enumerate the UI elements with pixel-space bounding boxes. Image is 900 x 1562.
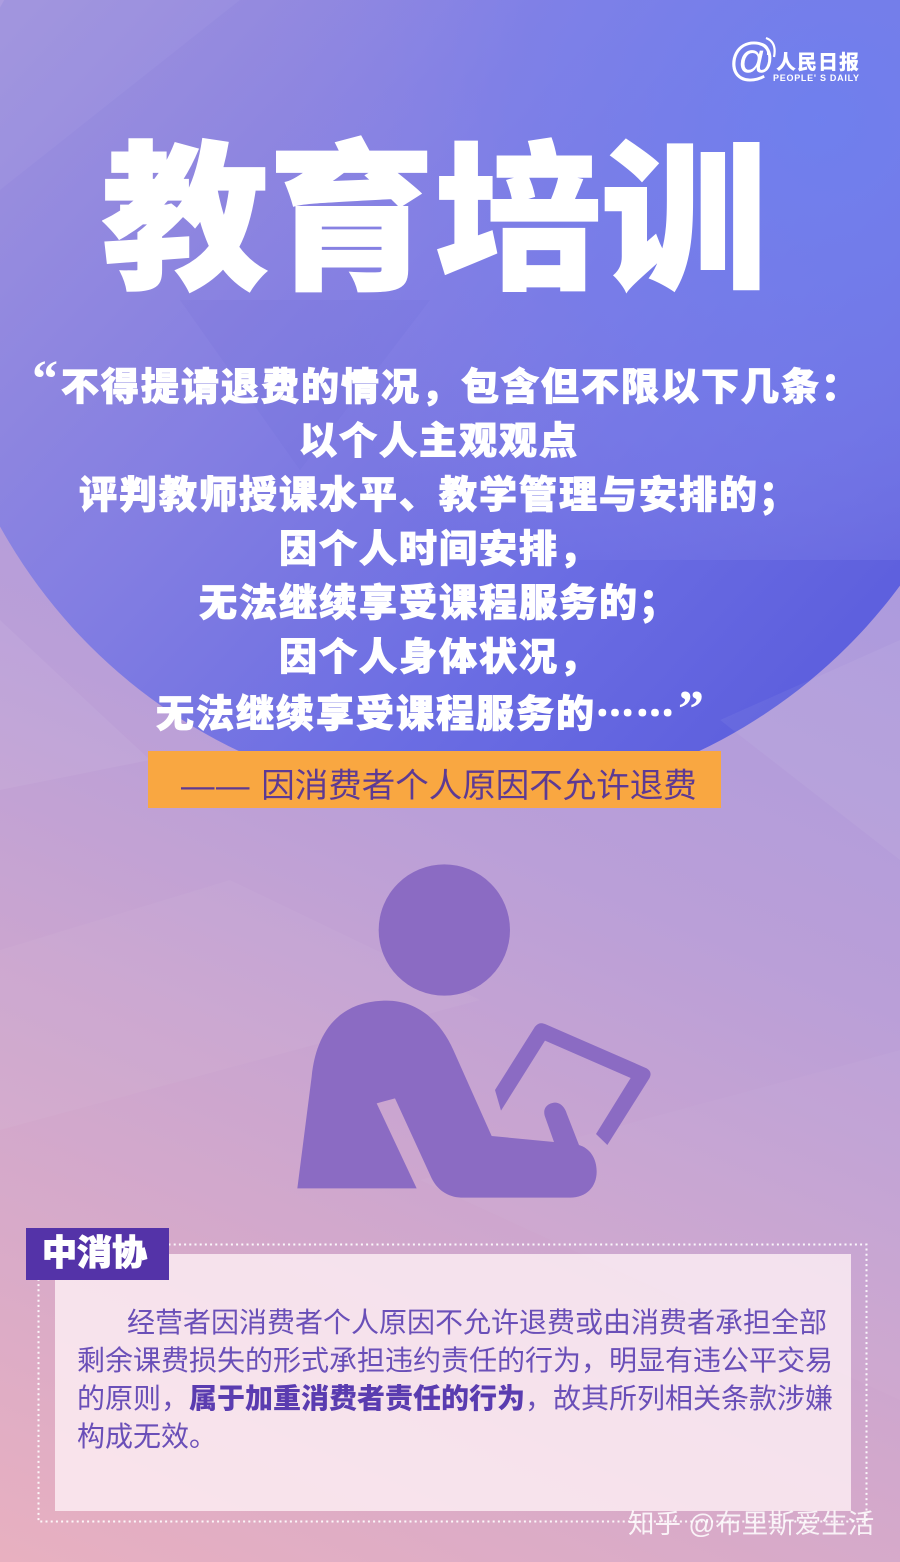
quote line 3: 评判教师授课水平、教学管理与安排的；	[79, 475, 799, 517]
logo: People's Daily: 人民日报	[776, 51, 859, 74]
quote line 6: 因个人身体状况，	[279, 637, 599, 679]
watermark: 知乎 @布里斯爱生活	[628, 1509, 874, 1539]
tag: 中消协: 中消协	[42, 1234, 147, 1273]
icon: person writing on a tablet	[297, 864, 650, 1198]
body text	[77, 1307, 833, 1452]
orange source banner: —— 因消费者个人原因不允许退费	[181, 768, 697, 805]
body text: 构成无效。	[77, 1421, 217, 1452]
tag: 中消协	[26, 1228, 169, 1280]
dotted frame	[38, 1244, 868, 1522]
quote line 7: 无法继续享受课程服务的……	[156, 683, 676, 738]
body text: 剩余课费损失的形式承担违约责任的行为，明显有违公平交易	[77, 1345, 833, 1376]
logo: People's Daily	[730, 33, 859, 85]
closing quotation mark: ”	[678, 681, 704, 738]
quote text block	[32, 351, 861, 738]
opening quotation mark: “	[32, 351, 58, 408]
quote line 2: 以个人主观观点	[299, 421, 579, 463]
body text: 的原则，属于加重消费者责任的行为，故其所列相关条款涉嫌	[77, 1383, 833, 1414]
quote line 4: 因个人时间安排，	[279, 529, 599, 571]
orange source banner	[148, 751, 721, 808]
body text: 经营者因消费者个人原因不允许退费或由消费者承担全部	[127, 1307, 827, 1338]
panel: consumer association statement	[55, 1254, 851, 1511]
title: 教育培训	[102, 131, 768, 310]
quote line 5: 无法继续享受课程服务的；	[199, 583, 679, 625]
quote line 1: 不得提请退费的情况，包含但不限以下几条：	[61, 367, 861, 409]
logo: People's Daily: PEOPLE' S DAILY	[773, 73, 859, 83]
logo: People's Daily: @	[730, 33, 775, 85]
